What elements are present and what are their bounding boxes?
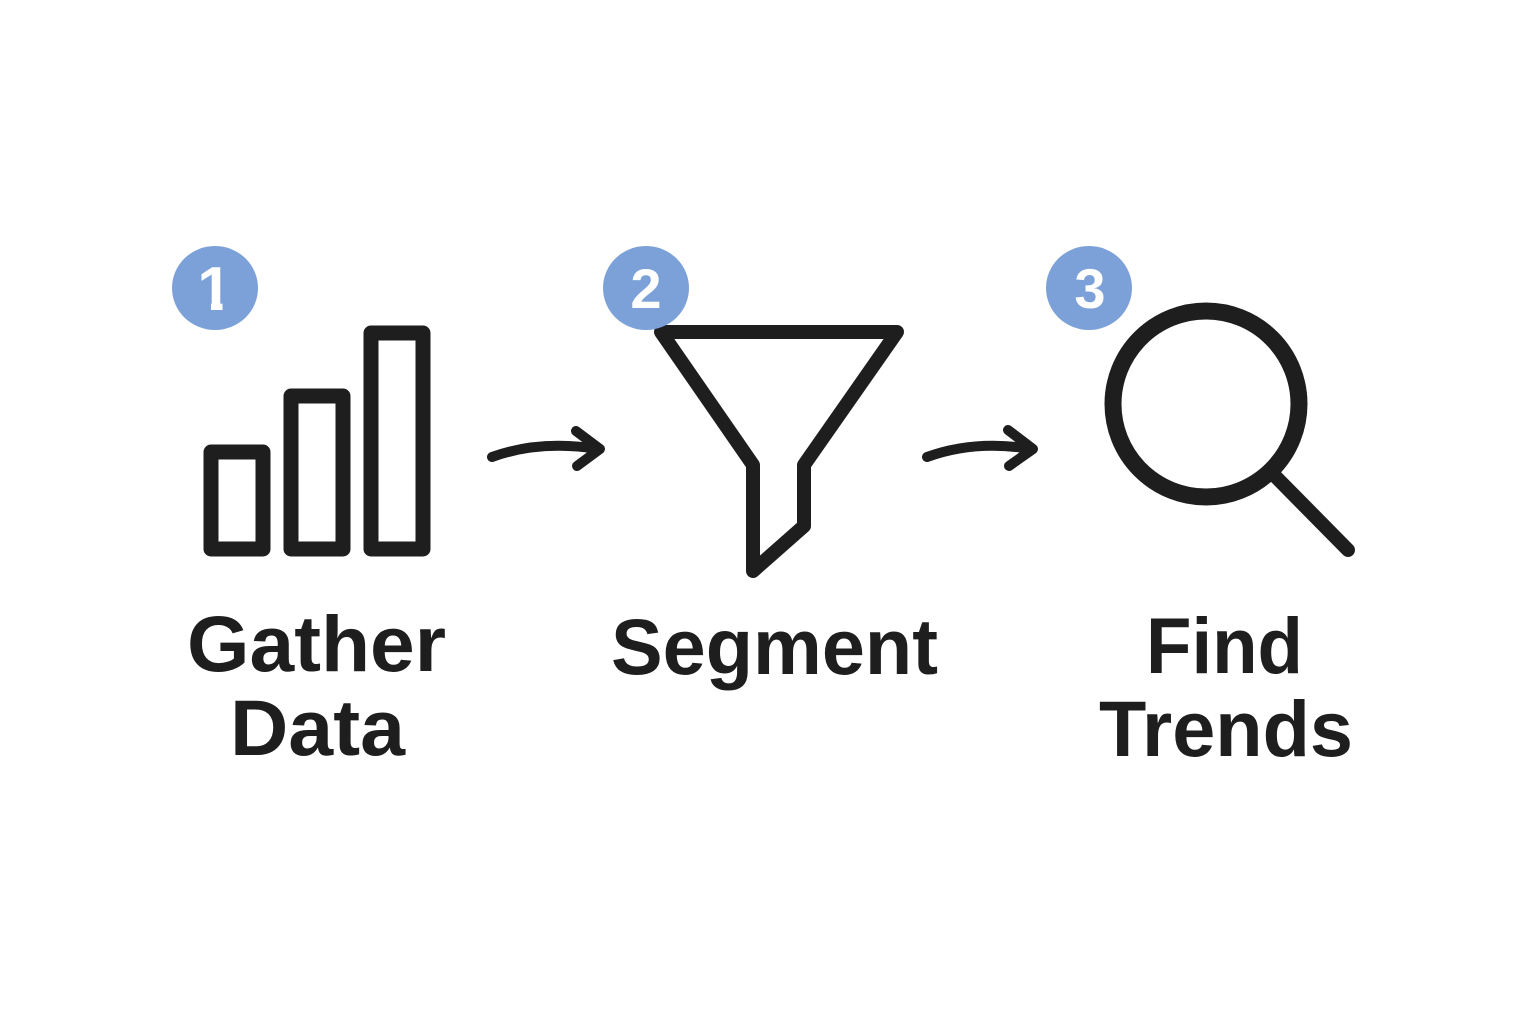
arrow 2 bbox=[927, 430, 1033, 466]
badge 1: 1 bbox=[197, 255, 232, 324]
arrow 1 bbox=[492, 431, 600, 466]
icon: funnel bbox=[661, 332, 897, 571]
badge 3: 3 bbox=[1074, 257, 1106, 320]
step 2: segment bbox=[603, 246, 938, 691]
badge 2: 2 bbox=[630, 257, 662, 320]
label: Gather Data: Data bbox=[230, 683, 406, 772]
label: Find Trends: Find bbox=[1146, 601, 1303, 690]
badge 1 bbox=[172, 246, 258, 330]
icon: bar chart bbox=[211, 333, 423, 549]
step 1: gather data bbox=[172, 246, 446, 772]
badge 2 bbox=[603, 246, 689, 330]
label: Find Trends bbox=[1099, 601, 1353, 773]
label: Gather Data bbox=[187, 599, 446, 772]
badge 3 bbox=[1046, 246, 1132, 330]
icon: magnifying glass bbox=[1113, 311, 1348, 550]
step 3: find trends bbox=[1046, 246, 1353, 773]
label: Gather Data: Gather bbox=[187, 599, 446, 688]
label: Segment: Segment bbox=[611, 602, 938, 691]
label: Find Trends: Trends bbox=[1099, 684, 1353, 773]
